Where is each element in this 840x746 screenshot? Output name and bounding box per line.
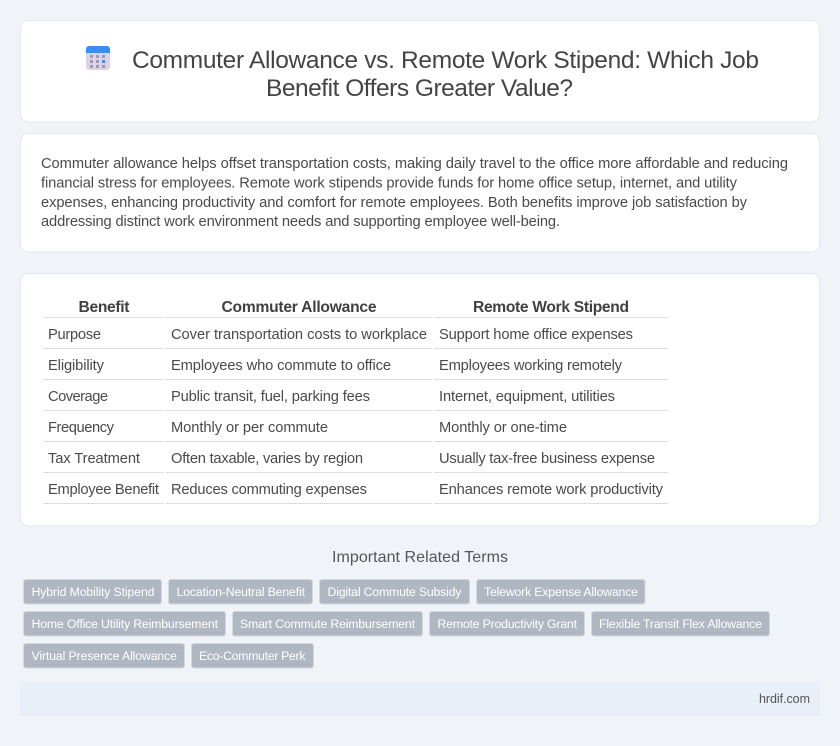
row: tax treatment: Tax Treatment xyxy=(48,451,140,467)
row: employee benefit: Reduces commuting expenses xyxy=(171,482,367,498)
panel: header xyxy=(20,20,820,122)
tag xyxy=(592,612,770,636)
table header: Benefit xyxy=(78,299,130,316)
tag: Telework Expense Allowance xyxy=(484,585,638,599)
row: frequency: Monthly or one-time xyxy=(439,420,567,436)
tag: Flexible Transit Flex Allowance xyxy=(599,617,762,631)
footer: hrdif.com xyxy=(759,692,810,706)
row: purpose: Support home office expenses xyxy=(439,327,633,343)
table header xyxy=(78,299,629,316)
row: purpose: Cover transportation costs to workplace xyxy=(171,327,427,343)
row: eligibility: Employees working remotely xyxy=(439,358,623,374)
row: purpose xyxy=(48,327,633,343)
tags: related terms xyxy=(24,580,770,668)
text block: introduction: Commuter allowance helps offset transportation costs, making daily travel to the office more affordable and reducing xyxy=(41,156,788,172)
row: frequency xyxy=(48,420,567,436)
tag: Hybrid Mobility Stipend xyxy=(32,585,155,599)
tag xyxy=(24,580,162,604)
text block: introduction xyxy=(41,156,788,230)
table rules xyxy=(43,318,668,504)
row: eligibility: Employees who commute to office xyxy=(171,358,391,374)
table header: Remote Work Stipend xyxy=(473,299,629,316)
tag: Remote Productivity Grant xyxy=(438,617,578,631)
text block: introduction: expenses, enhancing productivity and comfort for remote employees. Both benefits improve job satisfaction by xyxy=(41,195,748,211)
title: Commuter Allowance vs. Remote Work Stipend: Which Job xyxy=(132,47,759,74)
row: employee benefit: Enhances remote work productivity xyxy=(439,482,664,498)
row: coverage: Coverage xyxy=(48,389,108,405)
tag: Smart Commute Reimbursement xyxy=(240,617,416,631)
title xyxy=(132,47,759,102)
tag: Home Office Utility Reimbursement xyxy=(32,617,219,631)
row: employee benefit: Employee Benefit xyxy=(48,482,159,498)
text block: introduction: financial stress for employees. Remote work stipends provide funds for home office setup, internet, and utility xyxy=(41,176,738,192)
row: coverage: Internet, equipment, utilities xyxy=(439,389,615,405)
row: tax treatment xyxy=(48,451,655,467)
panel: comparison table xyxy=(20,274,820,526)
tag xyxy=(24,644,184,668)
row: coverage: Public transit, fuel, parking fees xyxy=(171,389,370,405)
row: tax treatment: Often taxable, varies by region xyxy=(171,451,363,467)
row: tax treatment: Usually tax-free business expense xyxy=(439,451,655,467)
heading: related terms: Important Related Terms xyxy=(332,549,508,566)
text block: introduction: addressing distinct work environment needs and supporting employee well-being. xyxy=(41,214,560,230)
row: eligibility xyxy=(48,358,623,374)
row: coverage xyxy=(48,389,615,405)
tag xyxy=(192,644,314,668)
tag xyxy=(430,612,584,636)
row: frequency: Monthly or per commute xyxy=(171,420,328,436)
tag: Eco-Commuter Perk xyxy=(199,649,306,663)
tag xyxy=(24,612,226,636)
footer xyxy=(20,682,820,716)
row: frequency: Frequency xyxy=(48,420,115,436)
icon: calendar xyxy=(86,46,110,70)
panel: introduction xyxy=(20,134,820,252)
tag xyxy=(476,580,645,604)
tag xyxy=(320,580,470,604)
tag xyxy=(168,580,312,604)
tag xyxy=(232,612,422,636)
row: purpose: Purpose xyxy=(48,327,101,343)
table header: Commuter Allowance xyxy=(222,299,377,316)
row: eligibility: Eligibility xyxy=(48,358,105,374)
tag: Virtual Presence Allowance xyxy=(32,649,177,663)
title: Benefit Offers Greater Value? xyxy=(266,75,573,102)
tag: Digital Commute Subsidy xyxy=(328,585,462,599)
tag: Location-Neutral Benefit xyxy=(176,585,306,599)
row: employee benefit xyxy=(48,482,664,498)
